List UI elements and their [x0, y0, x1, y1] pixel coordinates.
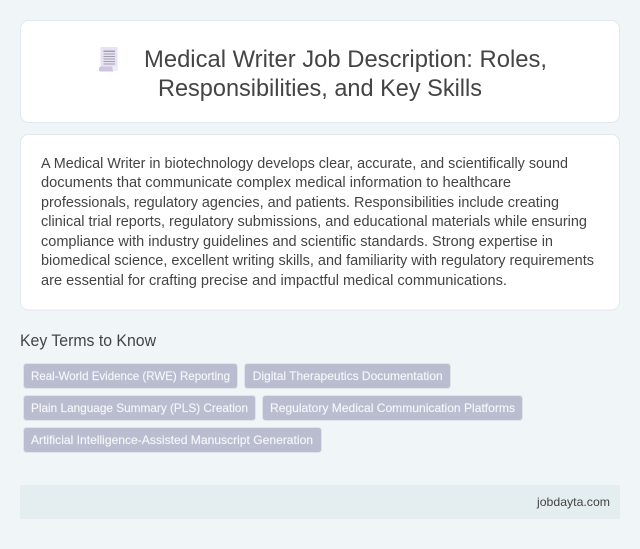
chip: digital therapeutics: [244, 364, 450, 388]
text block: job description: are essential for crafting precise and impactful medical communications.: [41, 273, 507, 289]
chip: real-world evidence: Real-World Evidence (RWE) Reporting: [31, 369, 230, 383]
text block: job description: [41, 156, 594, 289]
title: [144, 46, 547, 102]
chip: real-world evidence: [24, 364, 238, 388]
footer bar: jobdayta.com: [536, 495, 610, 509]
text block: job description: clinical trial reports, regulatory submissions, and educational materials while ensuring: [41, 214, 587, 230]
text block: job description: professionals, regulatory agencies, and patients. Responsibilities include creating: [41, 195, 559, 211]
panel: description card: [20, 134, 620, 310]
title: Medical Writer Job Description: Roles,: [144, 46, 547, 73]
chip: plain language summary: [24, 396, 256, 420]
text block: job description: compliance with industry guidelines and scientific standards. Strong expertise in: [41, 234, 553, 250]
text block: job description: A Medical Writer in biotechnology develops clear, accurate, and scientifically sound: [41, 156, 568, 172]
title: Responsibilities, and Key Skills: [158, 75, 482, 102]
panel: header card: [20, 20, 620, 122]
chip: regulatory platforms: Regulatory Medical Communication Platforms: [270, 401, 515, 415]
icon: document scroll: [99, 47, 118, 72]
chip: digital therapeutics: Digital Therapeutics Documentation: [253, 369, 443, 383]
chip: regulatory platforms: [262, 396, 522, 420]
chip: plain language summary: Plain Language Summary (PLS) Creation: [31, 401, 248, 415]
text block: job description: documents that communicate complex medical information to healthcare: [41, 175, 511, 191]
chip: AI-assisted manuscripts: Artificial Intelligence-Assisted Manuscript Generation: [31, 433, 313, 447]
footer bar: [20, 485, 620, 519]
text block: job description: biomedical science, excellent writing skills, and familiarity with regulatory requirements: [41, 253, 594, 269]
chip: AI-assisted manuscripts: [24, 428, 322, 452]
heading: key terms: Key Terms to Know: [20, 332, 156, 350]
